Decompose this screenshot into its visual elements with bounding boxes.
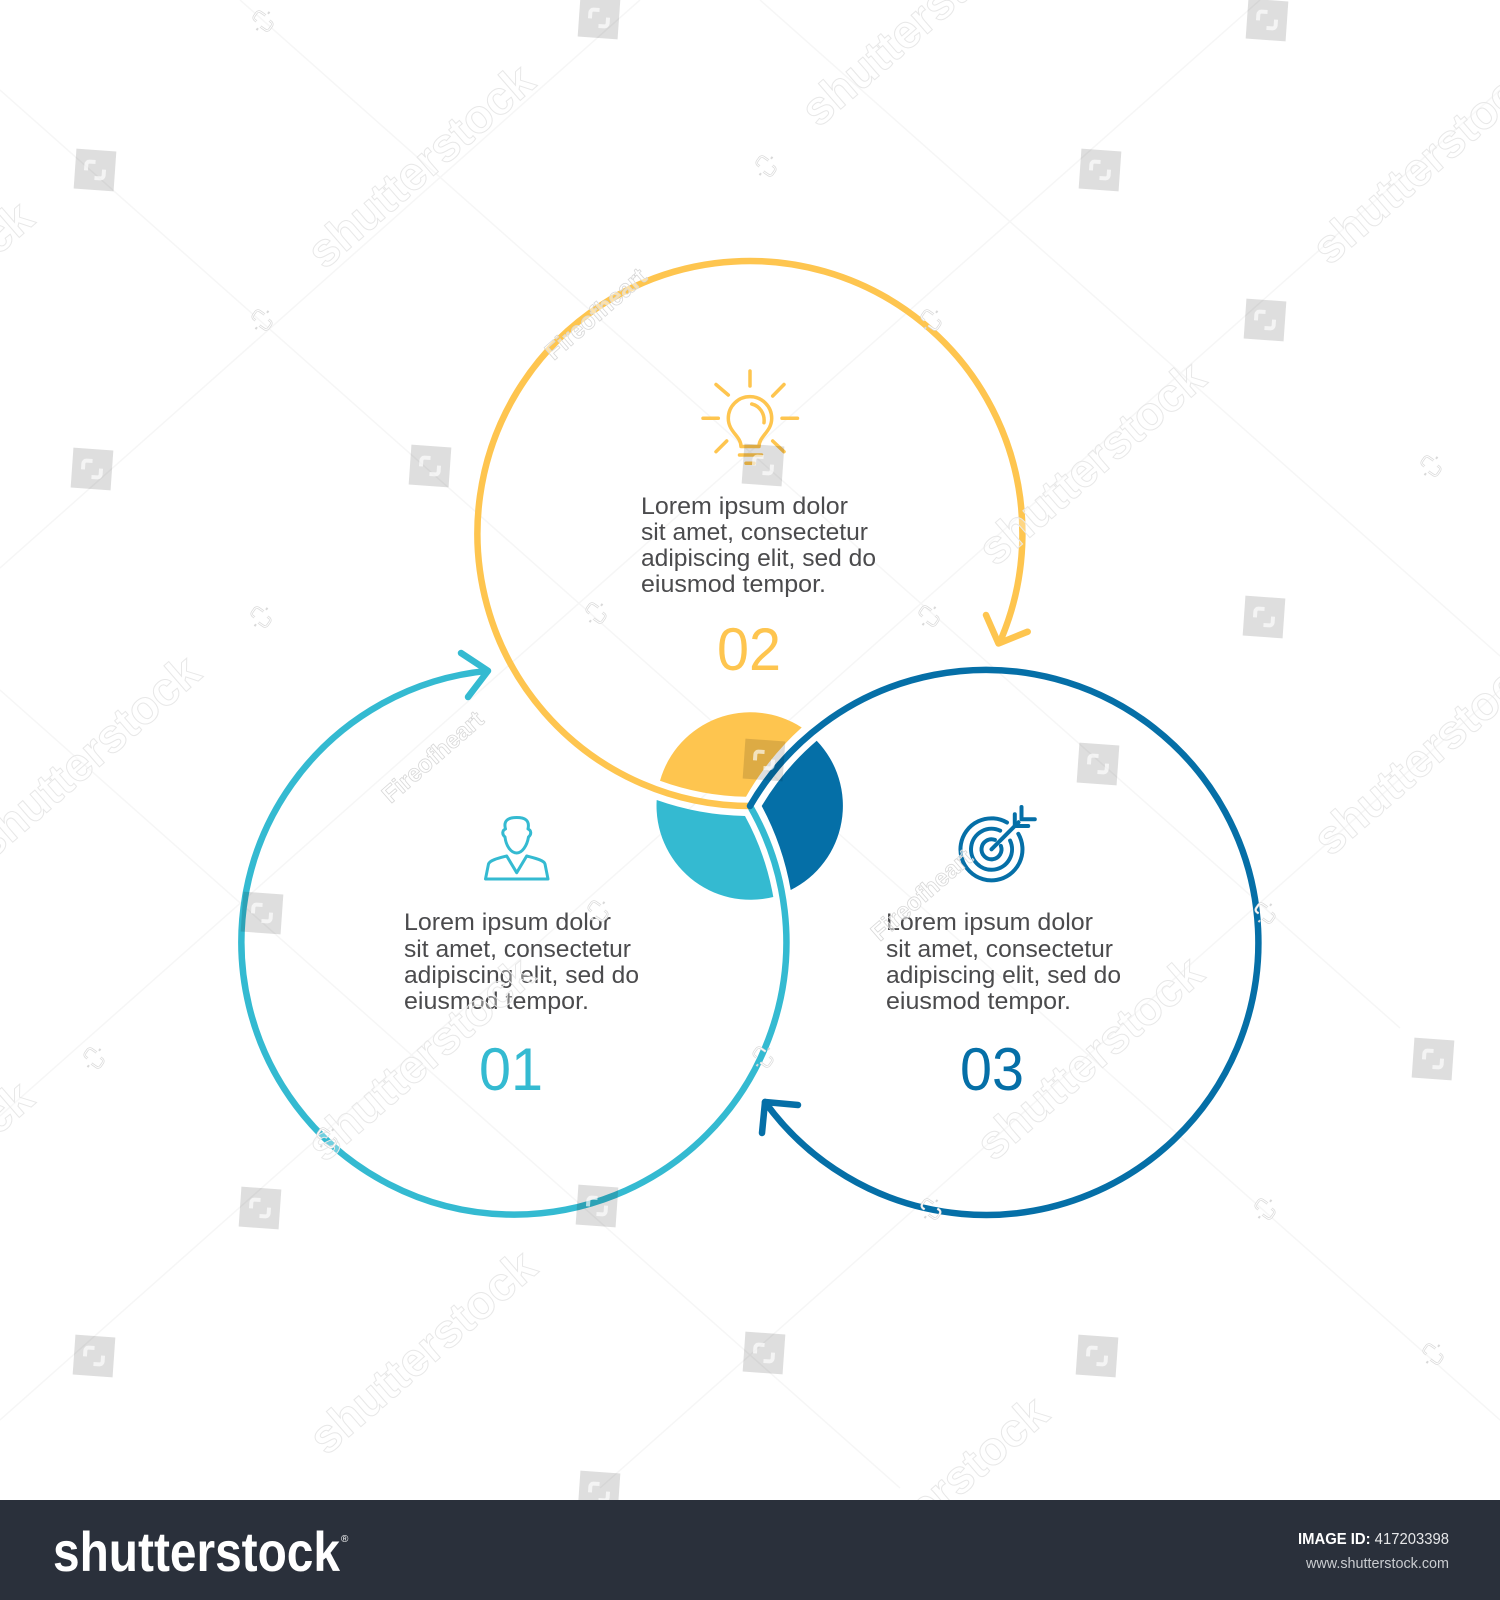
watermark: outlined wordmarks: shutterstock (967, 349, 1216, 575)
text block: step 03: adipiscing elit, sed do (886, 962, 1121, 989)
text block: step 01: adipiscing elit, sed do (404, 962, 639, 989)
ring 03 with arrow: blue (750, 670, 1258, 1215)
website: www.shutterstock.com (1305, 1555, 1449, 1572)
number: 02: 02 (717, 616, 781, 683)
footer logo: shutterstock (53, 1520, 341, 1583)
text block: step 01: eiusmod tempor. (404, 988, 589, 1015)
watermark: contributor name (377, 263, 978, 947)
watermark: outlined wordmarks: shutterstock (296, 945, 545, 1171)
pie slice: yellow (660, 712, 802, 797)
pie slice: teal (657, 800, 773, 900)
image id: IMAGE ID: 417203398 (1298, 1531, 1449, 1548)
icon: target (960, 807, 1035, 880)
text block: step 02: sit amet, consectetur (641, 519, 868, 546)
ring 02 with arrow: yellow (477, 261, 1028, 806)
text block: step 03 (886, 909, 1121, 1015)
text block: step 01: Lorem ipsum dolor (404, 909, 611, 936)
text block: step 02: eiusmod tempor. (641, 571, 826, 598)
icon: light bulb (703, 371, 798, 463)
text block: step 03: sit amet, consectetur (886, 936, 1113, 963)
icon: person (486, 818, 548, 879)
watermark: contributor name: Fireofheart (540, 263, 652, 366)
watermark: outlined wordmarks: shutterstock (296, 52, 545, 278)
footer bar (0, 1500, 1500, 1600)
text block: step 02: Lorem ipsum dolor (641, 493, 848, 520)
watermark: outlined wordmarks: shutterstock (298, 1238, 547, 1464)
text block: step 01: sit amet, consectetur (404, 936, 631, 963)
text block: step 03: eiusmod tempor. (886, 988, 1071, 1015)
text block: step 01 (404, 909, 639, 1015)
number: 03: 03 (960, 1036, 1024, 1103)
ring 01 with arrow: teal (241, 653, 786, 1215)
number: 01: 01 (479, 1036, 543, 1103)
watermark: outlined wordmarks: shutterstock (965, 944, 1214, 1170)
text block: step 03: Lorem ipsum dolor (886, 909, 1093, 936)
central pie chart (657, 712, 843, 900)
text block: step 02 (641, 493, 876, 598)
text block: step 02: adipiscing elit, sed do (641, 545, 876, 572)
watermark: contributor name: Fireofheart (866, 844, 978, 947)
pie slice: blue (762, 741, 843, 890)
registered mark: ® (341, 1534, 349, 1545)
watermark: contributor name: Fireofheart (377, 706, 489, 809)
watermark: small glyph marks (80, 7, 1447, 1368)
